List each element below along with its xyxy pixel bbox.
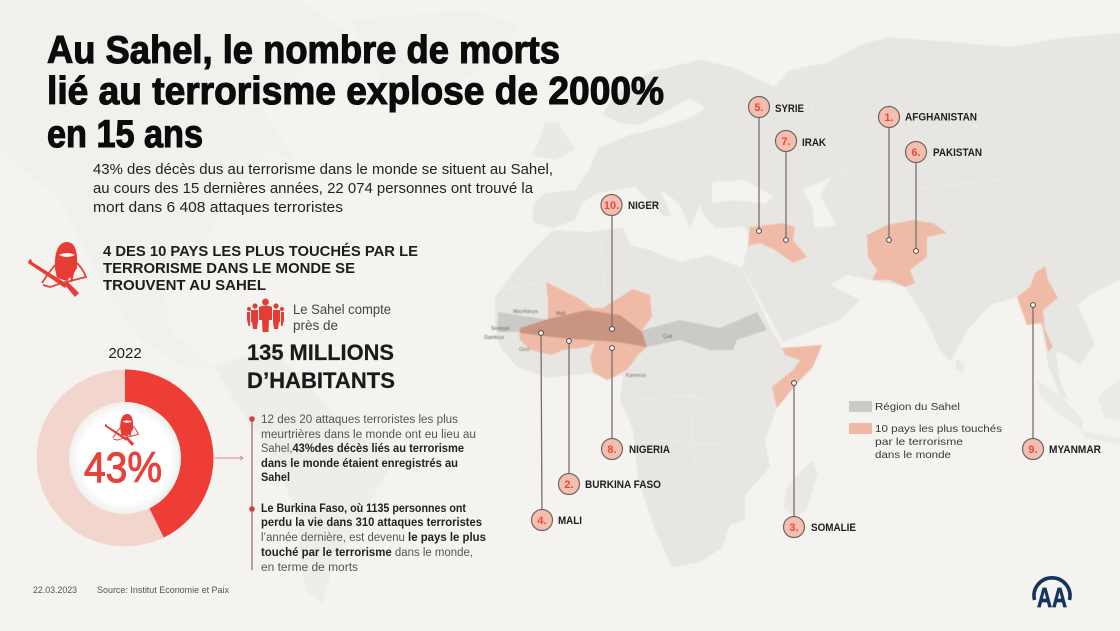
icon: armed terrorist bbox=[28, 242, 86, 297]
pin: Mali bbox=[532, 331, 582, 530]
Myanmar bbox=[1017, 266, 1058, 352]
donut chart 43% bbox=[53, 370, 213, 538]
title: en 15 ans bbox=[47, 113, 203, 156]
Sri Lanka bbox=[955, 358, 965, 373]
pin: Pakistan: PAKISTAN bbox=[933, 147, 982, 159]
date and source: 22.03.2023 bbox=[33, 585, 77, 595]
Eurasia land bbox=[533, 33, 1120, 400]
subtitle text: 43% des décès dus au terrorisme dans le monde se situent au Sahel, bbox=[93, 161, 553, 178]
subtitle text: mort dans 6 408 attaques terroristes bbox=[93, 199, 343, 216]
title: lié au terrorisme explose de 2000% bbox=[47, 70, 664, 113]
year label: 2022 bbox=[108, 345, 142, 362]
small country labels: Gambiya bbox=[484, 335, 504, 341]
pin: Syrie bbox=[748, 96, 804, 233]
faint Greenland bbox=[350, 10, 520, 105]
Caspian Sea bbox=[802, 177, 836, 228]
pin: Irak: 7. bbox=[781, 136, 791, 148]
pin: Irak: IRAK bbox=[802, 137, 826, 149]
text block: Burkina Faso: Le Burkina Faso, où 1135 personnes ont bbox=[261, 503, 466, 515]
small country labels: Senegal bbox=[491, 326, 509, 332]
pin: Niger: NIGER bbox=[628, 200, 659, 212]
Afghanistan and Pakistan bbox=[867, 220, 947, 287]
title: Au Sahel, le nombre de morts bbox=[47, 29, 560, 72]
pin: Afghanistan bbox=[878, 106, 977, 242]
pin: Myanmar bbox=[1022, 303, 1101, 460]
text block: Burkina Faso: perdu la vie dans 310 attaques terroristes bbox=[261, 517, 482, 529]
pin: Niger bbox=[601, 194, 659, 331]
pin: Somalie: SOMALIE bbox=[811, 522, 856, 534]
pin: Mali: 4. bbox=[537, 515, 547, 527]
legend bbox=[849, 401, 1002, 461]
icon: population group bbox=[247, 299, 284, 332]
text block: Burkina Faso bbox=[261, 503, 486, 574]
icon: small terrorist bbox=[105, 414, 138, 446]
population text: près de bbox=[293, 317, 338, 333]
small country labels: Mauritanya bbox=[513, 309, 538, 315]
Black Sea bbox=[712, 180, 774, 204]
population figure: 135 MILLIONS bbox=[247, 340, 394, 365]
heading: 4 of 10 countries: TERRORISME DANS LE MONDE SE bbox=[103, 260, 355, 277]
pin: Somalie bbox=[784, 381, 856, 538]
text block: Burkina Faso: en terme de morts bbox=[261, 562, 358, 574]
pin: Myanmar: 9. bbox=[1028, 444, 1038, 456]
population text: Le Sahel compte bbox=[293, 301, 391, 317]
Madagascar bbox=[783, 460, 818, 517]
legend: Région du Sahel bbox=[875, 401, 960, 413]
AA logo: AA bbox=[1037, 582, 1067, 613]
pin: Myanmar: MYANMAR bbox=[1049, 444, 1101, 456]
Indonesia bbox=[1037, 378, 1120, 444]
population text bbox=[293, 301, 391, 333]
pin: Afghanistan: 1. bbox=[884, 112, 894, 124]
Africa land bbox=[495, 227, 822, 567]
country borders bbox=[500, 80, 1085, 520]
heading: 4 of 10 countries: TROUVENT AU SAHEL bbox=[103, 277, 266, 294]
legend: dans le monde bbox=[875, 449, 951, 461]
Mali Burkina Niger Nigeria bbox=[519, 282, 652, 380]
small country labels bbox=[484, 309, 672, 379]
pin: Afghanistan: AFGHANISTAN bbox=[905, 112, 977, 124]
text block: attacks bbox=[261, 414, 476, 484]
pin: Syrie: 5. bbox=[754, 102, 764, 114]
small country labels: Mali bbox=[556, 311, 565, 317]
timeline rule bbox=[249, 416, 255, 570]
subtitle text bbox=[93, 161, 553, 216]
pin: Pakistan bbox=[906, 142, 982, 253]
pin: Burkina Faso: BURKINA FASO bbox=[585, 479, 661, 491]
pin: Burkina Faso: 2. bbox=[564, 479, 574, 491]
Syria and Iraq bbox=[748, 223, 807, 263]
text block: Burkina Faso: touché par le terrorisme dans le monde, bbox=[261, 547, 473, 559]
map pins bbox=[532, 96, 1101, 538]
legend: 10 pays les plus touchés bbox=[875, 423, 1002, 435]
pin: Nigeria bbox=[602, 346, 670, 460]
title bbox=[47, 29, 664, 156]
text block: attacks: 12 des 20 attaques terroristes les plus bbox=[261, 414, 458, 426]
subtitle text: au cours des 15 dernières années, 22 074 personnes ont trouvé la bbox=[93, 180, 534, 197]
date and source: Source: Institut Economie et Paix bbox=[97, 585, 229, 595]
percentage: 43% bbox=[84, 444, 162, 492]
text block: Burkina Faso: l’année dernière, est devenu le pays le plus bbox=[261, 532, 486, 544]
heading: 4 of 10 countries bbox=[103, 243, 418, 294]
pin: Pakistan: 6. bbox=[911, 147, 921, 159]
population figure: D’HABITANTS bbox=[247, 368, 395, 393]
Somalia bbox=[772, 345, 822, 408]
pin: Niger: 10. bbox=[604, 200, 619, 212]
Sahel region bbox=[497, 310, 767, 350]
pin: Irak bbox=[776, 130, 826, 242]
AA logo bbox=[1034, 578, 1070, 613]
pin: Burkina Faso bbox=[558, 339, 661, 494]
small country labels: Gine bbox=[519, 347, 530, 353]
date and source bbox=[33, 585, 229, 595]
population figure bbox=[247, 340, 395, 393]
overlap of Sahel and affected countries bbox=[520, 310, 647, 347]
text block: attacks: meurtrières dans le monde ont eu lieu au bbox=[261, 429, 476, 441]
arrow from donut bbox=[214, 456, 243, 460]
pin: Somalie: 3. bbox=[789, 522, 799, 534]
small country labels: Kamerun bbox=[626, 373, 647, 379]
legend: par le terrorisme bbox=[875, 436, 963, 448]
British Isles bbox=[532, 122, 575, 160]
heading: 4 of 10 countries: 4 DES 10 PAYS LES PLUS TOUCHÉS PAR LE bbox=[103, 243, 418, 260]
pin: Mali: MALI bbox=[558, 515, 582, 527]
pin: Syrie: SYRIE bbox=[775, 103, 804, 115]
small country labels: Çad bbox=[663, 334, 672, 340]
faint South America bbox=[215, 345, 395, 605]
pin: Nigeria: 8. bbox=[607, 444, 617, 456]
text block: attacks: dans le monde étaient enregistrés au bbox=[261, 458, 458, 470]
faint North America bbox=[0, 0, 345, 370]
pin: Nigeria: NIGERIA bbox=[629, 444, 670, 456]
text block: attacks: Sahel bbox=[261, 472, 290, 484]
text block: attacks: Sahel,43%des décès liés au terrorisme bbox=[261, 443, 464, 455]
